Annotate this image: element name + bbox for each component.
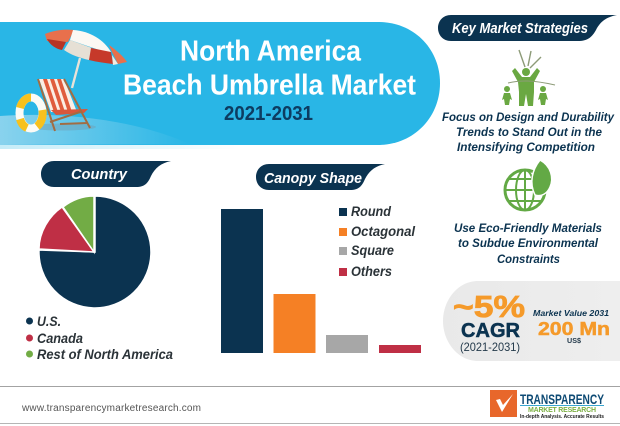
heading: country <box>41 161 171 187</box>
market value figure <box>533 309 610 345</box>
banner <box>0 22 440 149</box>
icon: globe with leaf <box>505 160 552 210</box>
legend: country: U.S. <box>37 314 61 329</box>
legend: canopy shape: Octagonal <box>351 224 415 239</box>
website address: www.transparencymarketresearch.com <box>21 403 201 414</box>
heading: key market strategies: Key Market Strategies <box>452 20 588 37</box>
footer <box>0 386 620 424</box>
swim ring <box>20 98 42 128</box>
market value figure: Market Value 2031 <box>533 309 610 318</box>
logo: transparency market research: In-depth Analysis. Accurate Results <box>520 414 604 420</box>
title: North America <box>180 36 362 68</box>
CAGR figure: (2021-2031) <box>460 340 520 354</box>
logo: transparency market research <box>490 390 604 420</box>
CAGR figure <box>453 289 525 354</box>
heading: canopy shape <box>256 164 385 190</box>
title: 2021-2031 <box>224 103 313 125</box>
panel: CAGR and market value <box>443 281 620 361</box>
legend: country: Rest of North America <box>37 347 173 362</box>
text: strategy one: Trends to Stand Out in the <box>456 125 602 139</box>
text: strategy two: to Subdue Environmental <box>458 236 599 250</box>
heading: key market strategies <box>438 15 617 41</box>
pie chart: country <box>39 196 151 308</box>
chair seat <box>39 79 77 112</box>
legend: canopy shape: Square <box>351 243 394 258</box>
CAGR figure: ~5% <box>453 289 525 324</box>
text: strategy two: Constraints <box>497 252 560 266</box>
logo: transparency market research: MARKET RESEARCH <box>528 407 596 414</box>
legend: canopy shape <box>339 204 415 279</box>
illustration: beach umbrella, chair and float <box>20 30 127 131</box>
text: strategy two: Use Eco-Friendly Materials <box>454 221 602 235</box>
CAGR figure: CAGR <box>461 319 520 342</box>
text: strategy one <box>442 110 615 154</box>
text: strategy one: Intensifying Competition <box>457 140 595 154</box>
legend: country: Canada <box>37 331 83 346</box>
title: Beach Umbrella Market <box>123 70 416 102</box>
heading: country: Country <box>71 166 128 183</box>
title <box>123 36 416 125</box>
heading: canopy shape: Canopy Shape <box>264 170 362 187</box>
legend: canopy shape: Others <box>351 264 392 279</box>
legend: canopy shape: Round <box>351 204 392 219</box>
icon: finish line runners <box>502 50 555 106</box>
market value figure: 200 Mn <box>538 318 610 339</box>
market value figure: US$ <box>567 338 581 345</box>
text: strategy one: Focus on Design and Durability <box>442 110 615 124</box>
text: strategy two <box>454 221 602 266</box>
legend: country <box>26 314 173 362</box>
bar chart: canopy shape <box>221 209 421 353</box>
